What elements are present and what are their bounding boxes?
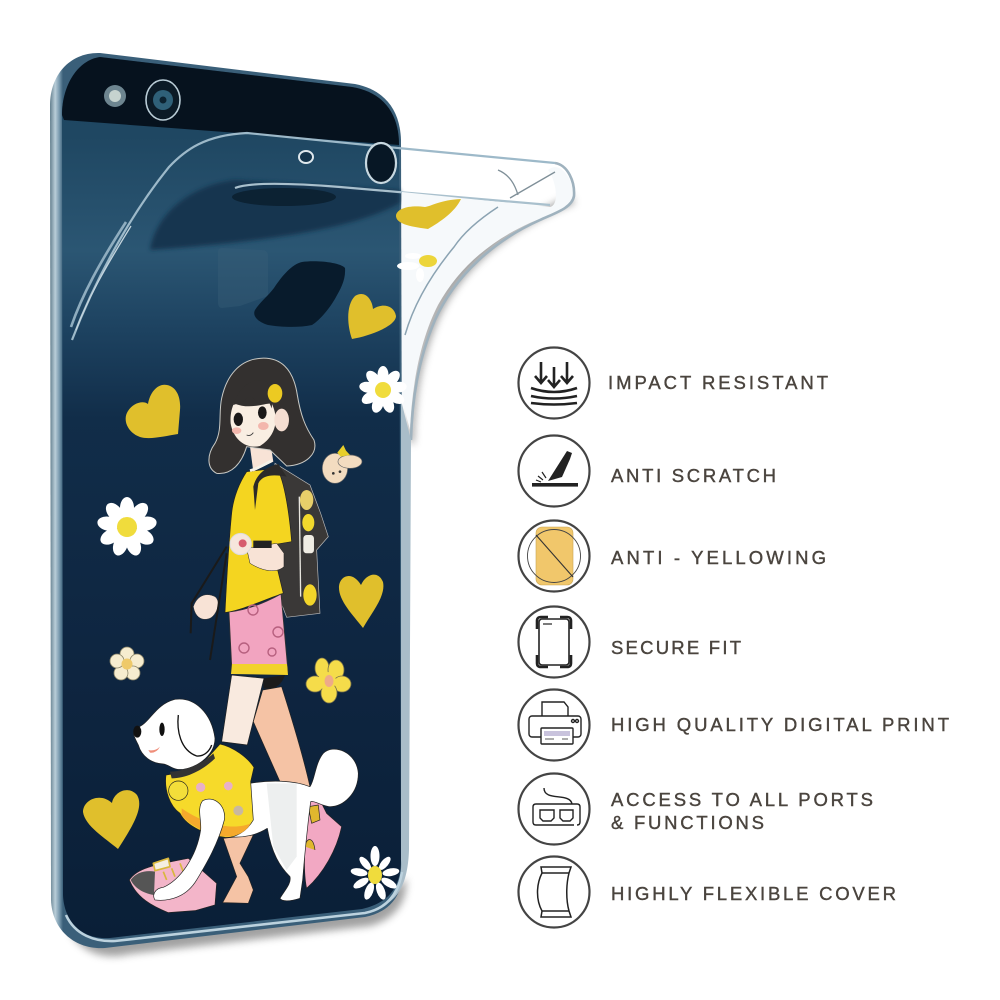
camera lens xyxy=(146,80,180,120)
bunny charm xyxy=(322,445,362,483)
artwork: daisy top right xyxy=(358,366,408,414)
front leg xyxy=(222,675,264,745)
label xyxy=(611,789,873,833)
label: ANTI - YELLOWING xyxy=(611,547,826,568)
black camera band xyxy=(62,57,399,145)
icon: printer xyxy=(529,702,581,744)
feature: impact resistant xyxy=(518,348,828,418)
hair xyxy=(209,358,315,473)
case corner diagonal xyxy=(498,170,555,198)
sneaker laces xyxy=(153,858,183,880)
feature: anti scratch xyxy=(518,436,776,506)
case outer lines xyxy=(71,133,555,340)
right edge highlight xyxy=(388,400,411,903)
dog body and tail xyxy=(230,749,358,901)
feature: secure fit xyxy=(518,606,741,678)
label: IMPACT RESISTANT xyxy=(608,372,828,393)
collar xyxy=(250,461,272,471)
phone back xyxy=(62,57,401,938)
icon: yellow case crossed xyxy=(528,527,580,585)
icon: impact arrows xyxy=(531,362,577,404)
case camera ring xyxy=(366,143,396,183)
label: & FUNCTIONS xyxy=(611,812,764,833)
case flare xyxy=(402,167,574,430)
label: ACCESS TO ALL PORTS xyxy=(611,789,873,810)
artwork: girl upper body xyxy=(191,358,362,660)
case small hole xyxy=(299,151,313,163)
dog front leg xyxy=(154,799,225,900)
camera flash xyxy=(104,85,126,107)
label: SECURE FIT xyxy=(611,637,741,658)
hoodie xyxy=(166,744,254,837)
sneaker details xyxy=(305,805,320,850)
sneaker toe xyxy=(131,871,155,895)
label: HIGH QUALITY DIGITAL PRINT xyxy=(611,714,949,735)
icon: phone in bumper case xyxy=(537,617,571,667)
artwork: daisy left xyxy=(96,497,158,558)
hoodie hem xyxy=(182,808,251,837)
artwork: dog, legs and sneakers xyxy=(129,675,358,913)
feature: anti yellowing xyxy=(518,520,826,592)
flare inner curve xyxy=(405,207,498,335)
eyes and cheeks xyxy=(232,406,269,435)
artwork: daisy bottom right xyxy=(350,846,400,901)
case dark band xyxy=(150,180,400,250)
backpack strap xyxy=(253,464,287,510)
artwork: yellow flower xyxy=(306,658,351,703)
bottom frame highlight xyxy=(66,872,402,941)
arm xyxy=(247,543,284,571)
icon: blade scratch xyxy=(532,451,578,487)
case shadow xyxy=(70,195,575,956)
icon: port block with cable xyxy=(533,788,580,825)
artwork: shorts xyxy=(229,594,288,675)
artwork: cream flower xyxy=(110,647,144,680)
feature: ports xyxy=(518,774,873,844)
left sneaker xyxy=(129,858,217,913)
lower leg xyxy=(223,835,253,903)
backpack charms xyxy=(299,490,317,606)
back leg xyxy=(253,687,310,787)
feature: flexible cover xyxy=(518,856,896,928)
hair clip xyxy=(268,384,282,403)
case speaker slot xyxy=(232,188,336,206)
fingerprint cutout xyxy=(254,261,345,327)
leash xyxy=(191,547,227,660)
black inner shorts xyxy=(263,675,285,689)
girl hand xyxy=(193,595,218,619)
fingerprint sensor recess xyxy=(218,248,268,308)
bangs xyxy=(233,380,272,408)
phone in clear case xyxy=(50,53,575,956)
dog head xyxy=(134,699,215,770)
label: ANTI SCRATCH xyxy=(611,465,776,486)
artwork: hearts xyxy=(83,199,461,849)
label: HIGHLY FLEXIBLE COVER xyxy=(611,883,896,904)
neck xyxy=(250,440,273,472)
phone frame xyxy=(50,53,403,948)
backpack xyxy=(270,463,328,617)
ear xyxy=(274,409,289,431)
dog collar and tag xyxy=(169,753,215,800)
icon: bent cover xyxy=(538,867,571,917)
feature: digital print xyxy=(518,690,949,760)
flare outer edge xyxy=(411,163,574,440)
face xyxy=(231,403,276,447)
shirt xyxy=(225,468,292,613)
artwork: faded daisy on flare xyxy=(397,253,437,282)
body sheen xyxy=(267,783,297,870)
dog features xyxy=(133,715,212,756)
hoodie spots xyxy=(196,782,243,816)
right sneaker xyxy=(304,800,342,888)
watch xyxy=(230,533,272,555)
